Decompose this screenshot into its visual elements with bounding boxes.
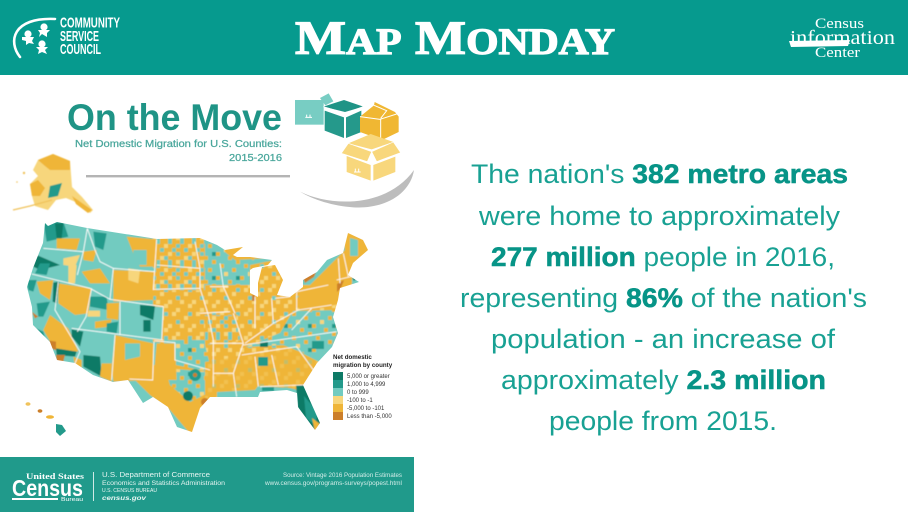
icon: moving boxes: [295, 93, 414, 208]
subtitle: Net Domestic Migration for U.S. Counties:: [75, 139, 282, 150]
logo: Census Information Center: information: [790, 27, 895, 49]
text block: metro area statistics: 277 million people in 2016,: [491, 242, 835, 272]
logo: Census Information Center: Census: [815, 16, 864, 32]
eastern state lines: [200, 253, 353, 397]
legend: Net domestic: [333, 354, 372, 361]
source text: www.census.gov/programs-surveys/popest.html: [264, 481, 402, 487]
department text: census.gov: [102, 495, 146, 502]
divider under subtitle: [86, 175, 290, 177]
department text: [102, 470, 225, 502]
legend: 1,000 to 4,999: [347, 382, 386, 388]
logo: Community Service Council: SERVICE: [60, 28, 99, 45]
Hawaii: [26, 402, 66, 436]
legend: -100 to -1: [347, 398, 373, 404]
logo: Community Service Council: [14, 14, 120, 58]
contiguous United States: [27, 222, 368, 432]
western state lines: [32, 228, 213, 387]
source text: [264, 473, 402, 487]
header banner: [0, 0, 908, 75]
subtitle: [75, 139, 282, 164]
logo: Census Information Center: Center: [815, 45, 860, 61]
Census wordmark: Bureau: [61, 497, 83, 503]
legend: [333, 354, 393, 420]
western half regions: [27, 222, 213, 387]
text block: metro area statistics: population - an increase of: [491, 324, 836, 354]
text block: metro area statistics: people from 2015.: [549, 406, 777, 436]
heading: On the Move: On the Move: [67, 97, 282, 138]
title: Map Monday: MAP MONDAY: [295, 12, 615, 65]
Census wordmark: United States: [26, 471, 85, 481]
logo: Census Information Center: [789, 16, 895, 61]
department text: U.S. CENSUS BUREAU: [102, 488, 157, 494]
Census wordmark: Census: [12, 475, 83, 501]
legend: 0 to 999: [347, 390, 369, 396]
legend: 5,000 or greater: [347, 374, 390, 380]
legend: migration by county: [333, 362, 393, 369]
department text: Economics and Statistics Administration: [102, 480, 225, 487]
department text: U.S. Department of Commerce: [102, 470, 210, 479]
source text: Source: Vintage 2016 Population Estimates: [283, 473, 402, 479]
text block: metro area statistics: were home to approximately: [478, 201, 841, 231]
legend: -5,000 to -101: [347, 406, 385, 412]
eastern half regions: [130, 230, 370, 436]
logo: Community Service Council: COUNCIL: [60, 41, 101, 58]
text block: metro area statistics: [460, 159, 867, 436]
text block: metro area statistics: approximately 2.3 million: [501, 365, 826, 395]
logo: Community Service Council: COMMUNITY: [60, 14, 120, 32]
subtitle: 2015-2016: [229, 153, 282, 164]
text block: metro area statistics: The nation's 382 metro areas: [471, 159, 848, 189]
footer: U.S. Census Bureau credits: [0, 457, 414, 512]
map: net domestic migration by county: [13, 154, 393, 440]
legend: Less than -5,000: [347, 414, 392, 420]
text block: metro area statistics: representing 86% of the nation's: [460, 283, 867, 313]
Alaska: [13, 154, 93, 213]
